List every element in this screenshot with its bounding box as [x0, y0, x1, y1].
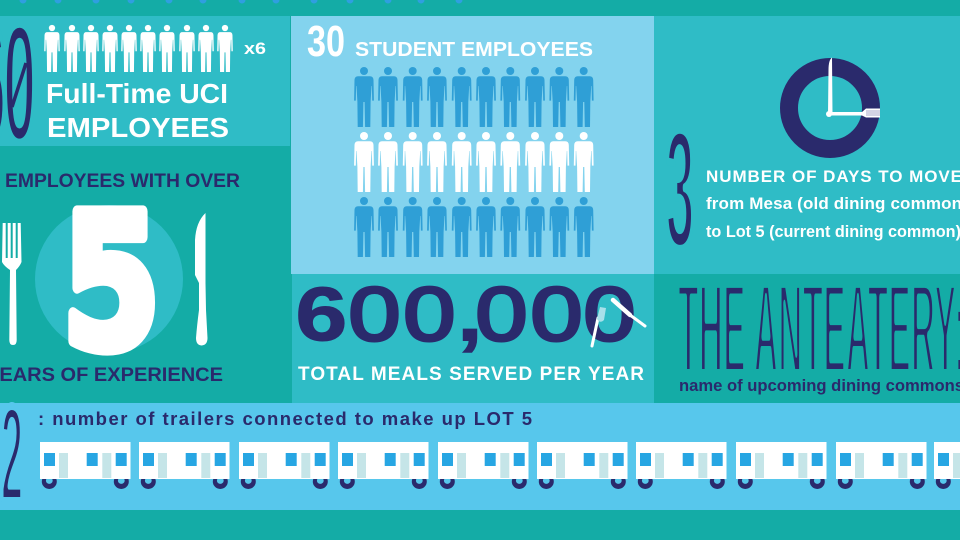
panel: student employees — [291, 16, 654, 274]
number 600,000: 0 — [348, 273, 400, 357]
number 3: 3 — [666, 97, 694, 284]
text: number of days to move: NUMBER OF DAYS TO MOVE — [706, 167, 960, 186]
number 600,000: , — [457, 273, 483, 357]
icon: fork — [2, 223, 22, 345]
panel: full-time employees — [0, 0, 290, 177]
icon: clock with knife and fork hands — [789, 58, 880, 149]
icons: second row of people — [354, 132, 594, 192]
panel: total meals — [292, 273, 654, 403]
number 2: 2 — [1, 379, 23, 531]
title: the anteatery: THE ANTEATERY: — [678, 256, 960, 402]
multiplier: x6 — [244, 39, 266, 58]
big number 5: 5 — [62, 175, 160, 391]
text: from Mesa: from Mesa (old dining common — [706, 194, 960, 213]
number 600,000: 0 — [530, 273, 582, 357]
panel: days to move — [654, 16, 960, 284]
number 600,000: 6 — [295, 273, 347, 357]
plate circle — [35, 205, 183, 353]
heading: student employees: STUDENT EMPLOYEES — [355, 38, 593, 61]
icon: fork — [592, 307, 606, 346]
heading: employees with over: EMPLOYEES WITH OVER — [5, 171, 240, 192]
icon: knife — [613, 300, 645, 326]
number 30: 30 — [307, 17, 345, 66]
label: total meals: TOTAL MEALS SERVED PER YEAR — [298, 364, 644, 385]
number 600,000: 0 — [584, 273, 635, 357]
icons: ten white people — [44, 25, 233, 72]
panel: years of experience — [0, 146, 290, 403]
label: number of trailers: : number of trailers connected to make up LOT 5 — [38, 408, 532, 429]
panel: the anteatery — [654, 256, 960, 403]
icons: first row of people — [354, 67, 594, 127]
number 600,000: 0 — [403, 273, 455, 357]
number 600,000: 0 — [476, 273, 528, 357]
panel: trailers — [0, 379, 960, 531]
icons: third row of people — [354, 197, 594, 257]
icons: row of trailers — [40, 442, 960, 489]
top row of dots — [20, 0, 462, 4]
label: employees: EMPLOYEES — [47, 112, 229, 143]
label: full-time: Full-Time UCI — [46, 78, 228, 109]
icon: knife — [195, 213, 208, 346]
